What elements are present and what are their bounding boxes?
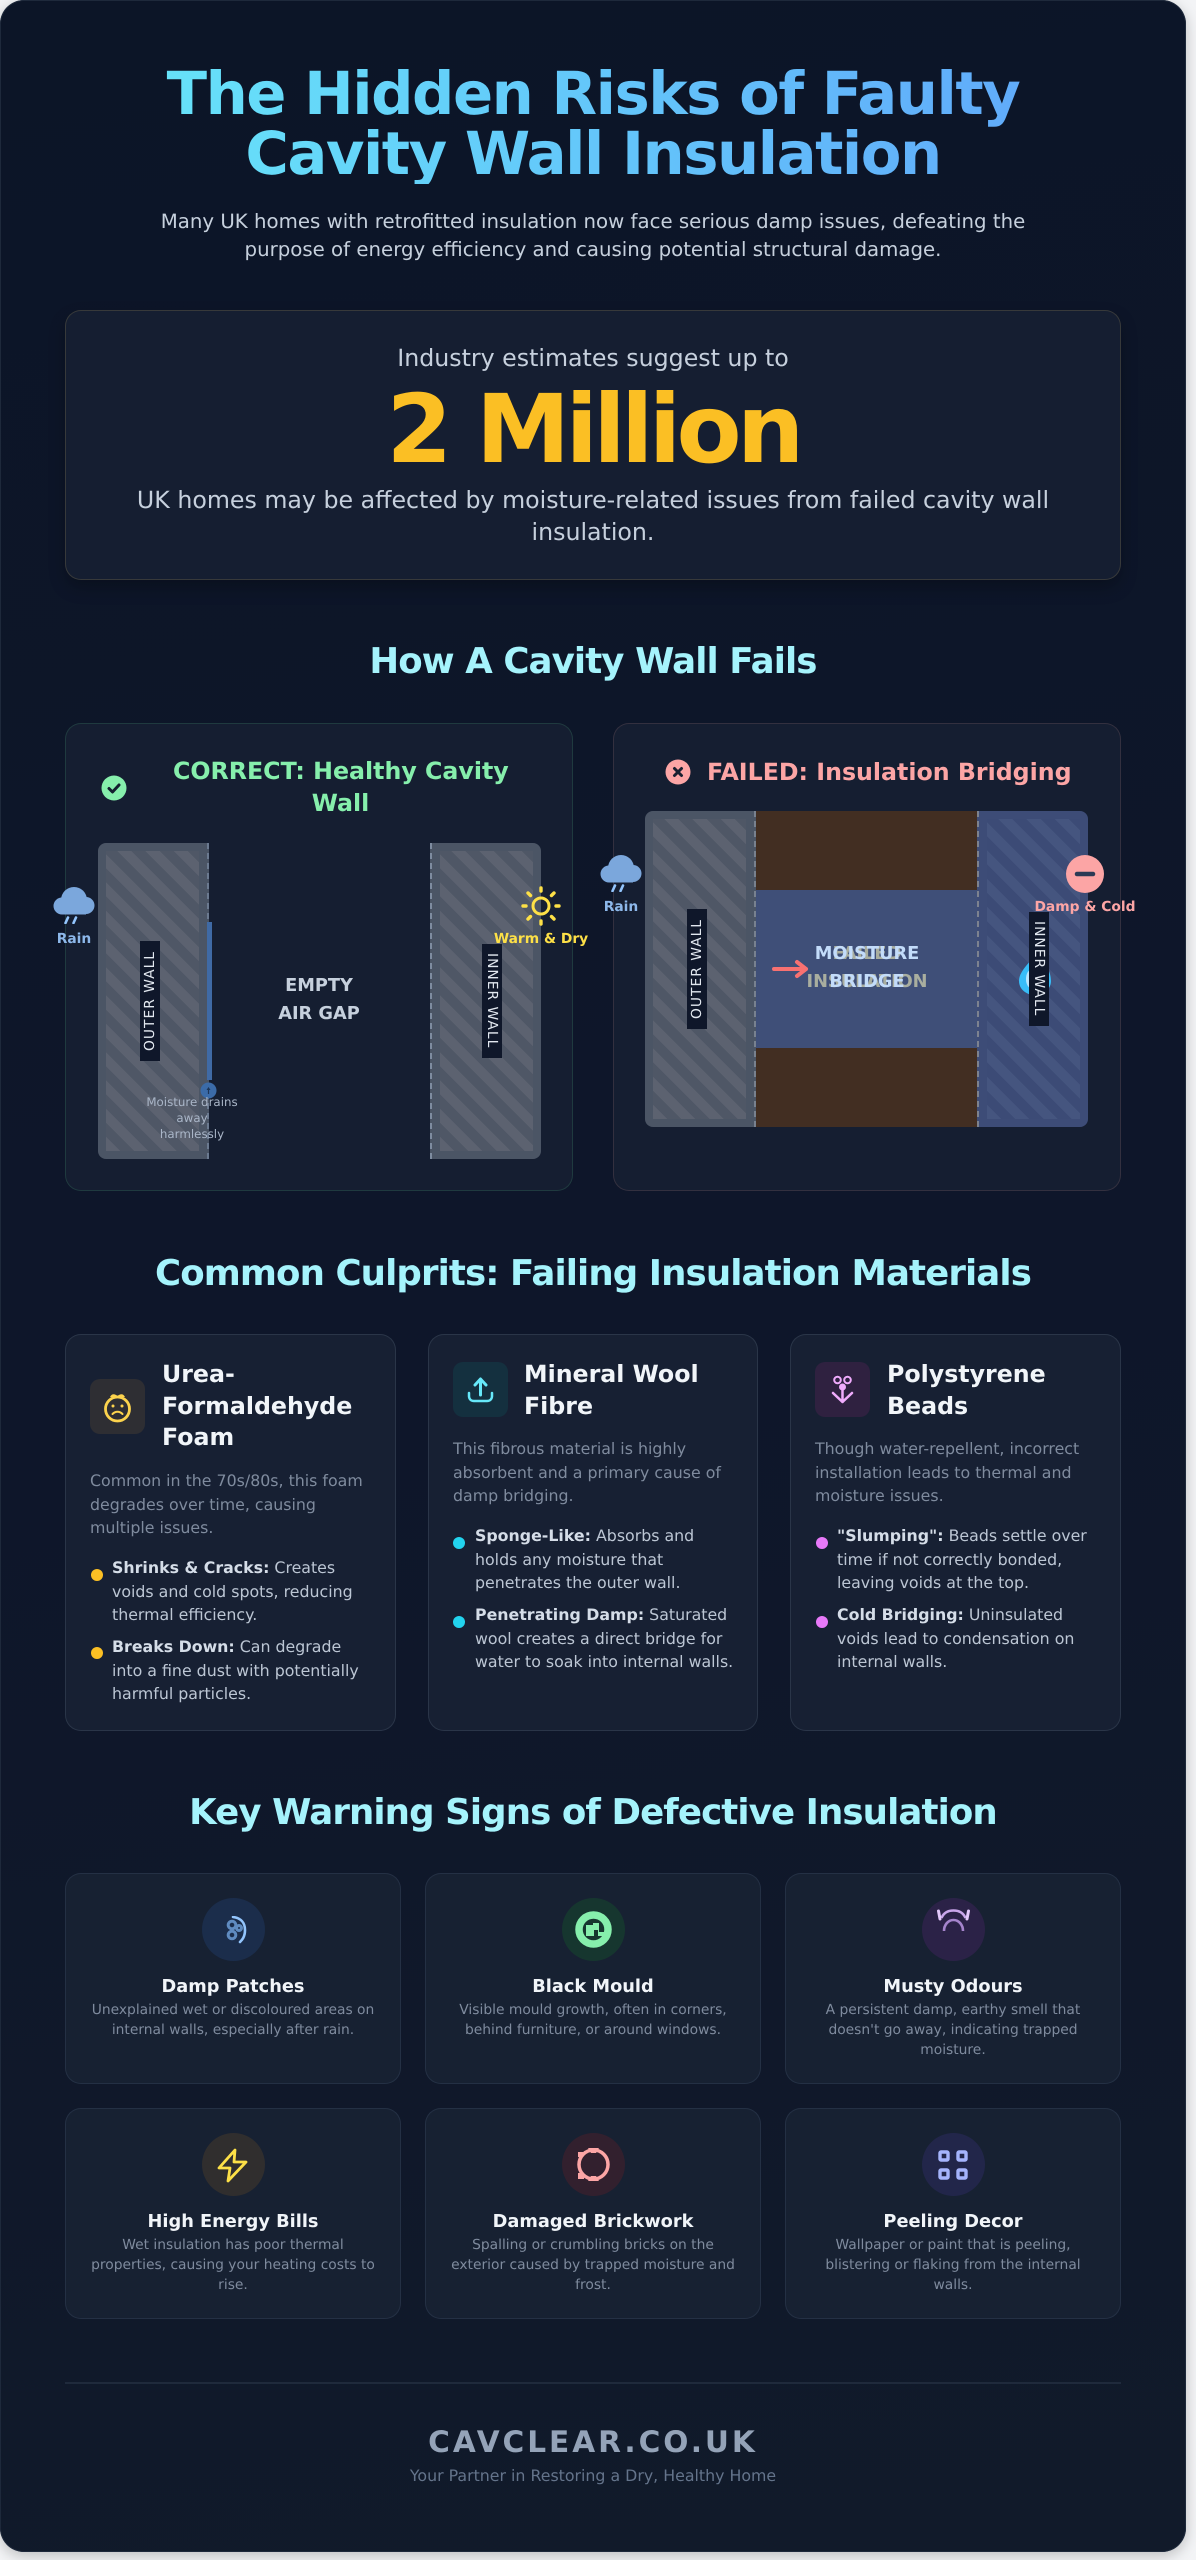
sign description: Spalling or crumbling bricks on the — [472, 2237, 714, 2253]
diagram: bridged wall — [600, 811, 1136, 1127]
sign title: Damaged Brickwork — [493, 2211, 693, 2232]
sign description: frost. — [575, 2276, 611, 2292]
failed insulation bottom — [756, 1048, 978, 1127]
sign description: rise. — [218, 2276, 248, 2292]
bullet: cold bridging — [837, 1605, 1074, 1671]
bullet: penetrating damp: water to soak into internal walls. — [475, 1652, 733, 1671]
panel: peeling decor — [785, 2108, 1121, 2319]
footer brand: CAVCLEAR.CO.UK — [428, 2425, 758, 2459]
panel: failed insulation bridging — [613, 723, 1121, 1191]
label: rain: Rain — [604, 899, 638, 915]
card description: Though water-repellent, incorrect — [815, 1439, 1079, 1458]
card description: damp bridging. — [453, 1486, 574, 1505]
bullet: sponge-like: holds any moisture that — [475, 1550, 663, 1569]
icon: rain cloud — [600, 855, 642, 892]
sign description — [826, 2002, 1080, 2058]
bullet: breaks down — [112, 1637, 359, 1703]
icon: red cross — [666, 760, 690, 784]
panel heading: failed: FAILED: Insulation Bridging — [707, 758, 1072, 786]
bullet: shrinks and cracks — [112, 1558, 353, 1624]
label: inner wall — [482, 944, 502, 1058]
bullet: shrinks and cracks: voids and cold spots, reducing — [112, 1582, 353, 1601]
sign description — [451, 2237, 735, 2292]
bullet: slumping: leaving voids at the top. — [837, 1573, 1029, 1592]
label: failed insulation underlay: INSULATION — [806, 971, 928, 992]
icon: moisture droplet — [200, 1082, 216, 1098]
note: moisture drains away: harmlessly — [160, 1127, 224, 1141]
label: moisture bridge — [815, 943, 919, 992]
bullet: shrinks and cracks: thermal efficiency. — [112, 1605, 257, 1624]
panel: damaged brickwork — [425, 2108, 761, 2319]
bullet dot — [453, 1616, 465, 1628]
bullet: breaks down: into a fine dust with potentially — [112, 1661, 359, 1680]
inner wall — [430, 843, 541, 1159]
title: The Hidden Risks of Faulty — [167, 59, 1019, 128]
icon: cracked ring — [562, 2133, 625, 2196]
sign description: doesn't go away, indicating trapped — [828, 2022, 1078, 2038]
sign title: Damp Patches — [162, 1976, 304, 1997]
icon: green check — [102, 776, 126, 800]
icon: sad face — [90, 1379, 145, 1434]
sign description: internal walls, especially after rain. — [112, 2022, 354, 2038]
label: empty air gap: AIR GAP — [278, 1002, 360, 1024]
note: moisture drains away: Moisture drains — [146, 1095, 238, 1109]
sign description — [91, 2237, 375, 2292]
label: empty air gap: EMPTY — [285, 975, 353, 996]
sign title: Peeling Decor — [883, 2211, 1023, 2232]
rain marker — [600, 855, 642, 915]
statistic number: 2 Million — [386, 375, 800, 485]
sign description — [92, 2002, 374, 2038]
sign description: walls. — [933, 2276, 973, 2292]
label: empty air gap — [278, 975, 360, 1024]
panel: damp patches — [65, 1873, 401, 2084]
note: moisture drains away: away — [176, 1111, 208, 1125]
panel: high energy bills — [65, 2108, 401, 2319]
icon: lightning bolt — [202, 2133, 265, 2196]
failed insulation top — [756, 811, 978, 890]
heading: key warning signs: Key Warning Signs of Defective Insulation — [189, 1792, 997, 1833]
label: inner wall — [1029, 912, 1049, 1026]
rain marker — [54, 887, 94, 947]
bullet: slumping: time if not correctly bonded, — [837, 1550, 1062, 1569]
bullet: slumping: "Slumping": Beads settle over — [837, 1526, 1087, 1545]
label: outer wall: OUTER WALL — [689, 919, 705, 1019]
title: Cavity Wall Insulation — [245, 119, 941, 188]
card description: installation leads to thermal and — [815, 1463, 1072, 1482]
statistic description: UK homes may be affected by moisture-related issues from failed cavity wall — [137, 486, 1049, 514]
card description — [452, 1439, 722, 1505]
card title: Urea- — [162, 1360, 235, 1388]
statistic description — [137, 486, 1049, 546]
label: outer wall — [687, 909, 707, 1029]
title — [65, 64, 1121, 184]
icon: rain cloud — [54, 887, 94, 924]
sign title: Black Mould — [532, 1976, 654, 1997]
bullet: penetrating damp — [475, 1605, 733, 1671]
panel: correct healthy cavity wall — [65, 723, 573, 1191]
label: moisture bridge: BRIDGE — [829, 971, 905, 992]
sign description: Unexplained wet or discoloured areas on — [92, 2002, 374, 2018]
icon: damp patches — [202, 1898, 265, 1961]
sign description: properties, causing your heating costs to — [91, 2257, 375, 2273]
card description: moisture issues. — [815, 1486, 944, 1505]
card title: Fibre — [524, 1392, 593, 1420]
bullet: penetrating damp: wool creates a direct bridge for — [475, 1629, 722, 1648]
subtitle — [161, 210, 1025, 261]
label: damp and cold: Damp & Cold — [1034, 899, 1136, 915]
card title: Formaldehyde — [162, 1392, 352, 1420]
card title: Polystyrene — [887, 1360, 1046, 1388]
card title: Foam — [162, 1423, 234, 1451]
sign description: A persistent damp, earthy smell that — [826, 2002, 1080, 2018]
icon: no entry — [1066, 855, 1104, 893]
sign description: Wallpaper or paint that is peeling, — [835, 2237, 1071, 2253]
heading: how a cavity wall fails: How A Cavity Wall Fails — [369, 641, 817, 682]
note: moisture drains away — [146, 1095, 238, 1141]
icon: odour waves — [922, 1898, 985, 1961]
card title — [162, 1360, 352, 1451]
bullet dot — [816, 1616, 828, 1628]
label: inner wall: INNER WALL — [1031, 921, 1047, 1017]
bullet: cold bridging: Cold Bridging: Uninsulated — [837, 1605, 1063, 1624]
card description: degrades over time, causing — [90, 1495, 316, 1514]
card title: Beads — [887, 1392, 968, 1420]
label: moisture bridge: MOISTURE — [815, 943, 919, 964]
bullet: slumping — [837, 1526, 1087, 1592]
bullet dot — [91, 1569, 103, 1581]
bullet: sponge-like: penetrates the outer wall. — [475, 1573, 680, 1592]
statistic description: insulation. — [532, 518, 654, 546]
sign description: blistering or flaking from the internal — [825, 2257, 1081, 2273]
bullet dot — [816, 1537, 828, 1549]
sign description — [825, 2237, 1081, 2292]
heading: common culprits: Common Culprits: Failing Insulation Materials — [155, 1253, 1031, 1294]
card description — [90, 1471, 363, 1537]
diagram: healthy wall — [54, 843, 588, 1159]
card title — [524, 1360, 699, 1420]
damp and cold marker — [1034, 855, 1136, 915]
panel: headline statistic — [65, 310, 1121, 580]
sign title: Musty Odours — [883, 1976, 1023, 1997]
label: warm and dry: Warm & Dry — [494, 931, 588, 947]
sign description: Visible mould growth, often in corners, — [459, 2002, 727, 2018]
moisture film — [207, 922, 212, 1080]
panel heading: correct — [173, 757, 509, 816]
sign description: moisture. — [920, 2042, 986, 2058]
card description: Common in the 70s/80s, this foam — [90, 1471, 363, 1490]
bullet dot — [91, 1647, 103, 1659]
arrow: moisture path — [772, 960, 808, 978]
label: outer wall — [140, 941, 160, 1061]
card description: multiple issues. — [90, 1518, 213, 1537]
panel heading: correct: CORRECT: Healthy Cavity — [173, 757, 509, 785]
icon: mould — [562, 1898, 625, 1961]
card description: This fibrous material is highly — [453, 1439, 686, 1458]
label: rain: Rain — [57, 931, 91, 947]
panel: mineral wool fibre — [428, 1334, 758, 1731]
panel: urea-formaldehyde foam — [65, 1334, 396, 1731]
icon: water drop — [1019, 962, 1051, 994]
sign description: Wet insulation has poor thermal — [122, 2237, 344, 2253]
icon: sun — [521, 886, 561, 926]
warm and dry marker — [494, 886, 588, 947]
subtitle: purpose of energy efficiency and causing potential structural damage. — [245, 238, 941, 261]
label: inner wall: INNER WALL — [484, 953, 500, 1049]
bullet: shrinks and cracks: Shrinks & Cracks: Creates — [112, 1558, 335, 1577]
card description — [814, 1439, 1079, 1505]
card description: absorbent and a primary cause of — [453, 1463, 721, 1482]
label: outer wall: OUTER WALL — [142, 951, 158, 1051]
panel: polystyrene beads — [790, 1334, 1121, 1731]
label: failed insulation underlay: FAILED — [833, 943, 901, 964]
panel: black mould — [425, 1873, 761, 2084]
icon: upload tray — [453, 1362, 508, 1417]
bullet: sponge-like — [475, 1526, 694, 1592]
bullet dot — [453, 1537, 465, 1549]
bullet: sponge-like: Sponge-Like: Absorbs and — [475, 1526, 694, 1545]
card title: Mineral Wool — [524, 1360, 699, 1388]
bullet: cold bridging: internal walls. — [837, 1652, 947, 1671]
sign description — [459, 2002, 727, 2038]
card title — [887, 1360, 1046, 1420]
bullet: breaks down: harmful particles. — [112, 1684, 251, 1703]
subtitle: Many UK homes with retrofitted insulation now face serious damp issues, defeating the — [161, 210, 1025, 233]
outer wall — [98, 843, 209, 1159]
statistic lead-in: Industry estimates suggest up to — [397, 344, 789, 372]
sign description: exterior caused by trapped moisture and — [451, 2257, 735, 2273]
panel heading: correct: Wall — [312, 788, 369, 816]
bullet: penetrating damp: Penetrating Damp: Saturated — [475, 1605, 727, 1624]
footer tagline: Your Partner in Restoring a Dry, Healthy Home — [410, 2466, 776, 2485]
bullet: cold bridging: voids lead to condensation on — [837, 1629, 1074, 1648]
bullet: breaks down: Breaks Down: Can degrade — [112, 1637, 341, 1656]
inner wall damp — [977, 811, 1088, 1127]
icon: four squares — [922, 2133, 985, 2196]
moisture bridge — [756, 890, 978, 1048]
outer wall — [645, 811, 756, 1127]
sign title: High Energy Bills — [148, 2211, 318, 2232]
icon: settling beads — [815, 1362, 870, 1417]
panel: musty odours — [785, 1873, 1121, 2084]
label: failed insulation underlay — [806, 943, 928, 992]
sign description: behind furniture, or around windows. — [465, 2022, 721, 2038]
